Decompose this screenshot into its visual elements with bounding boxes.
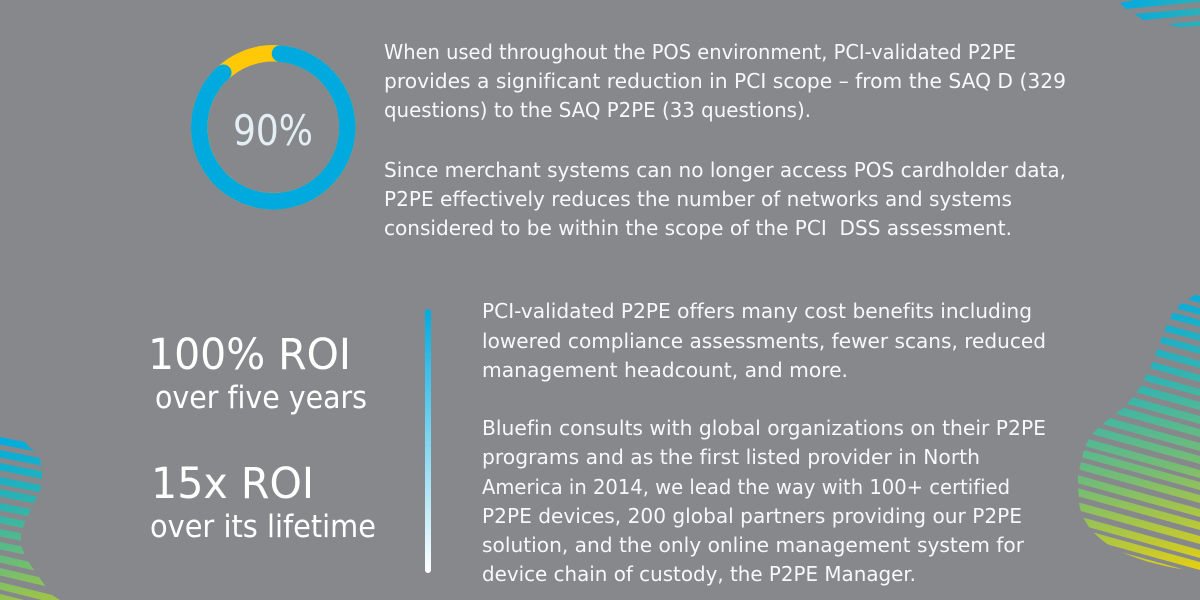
text block: cost benefits and Bluefin xyxy=(482,299,1046,586)
text block: scope reduction xyxy=(384,40,1066,240)
stat: 100% ROI over five years: over five years xyxy=(155,380,367,416)
text block: cost benefits and Bluefin: P2PE devices, 200 global partners providing our P2PE xyxy=(482,504,1022,528)
text block: cost benefits and Bluefin: lowered compliance assessments, fewer scans, reduced xyxy=(482,329,1046,353)
text block: cost benefits and Bluefin: Bluefin consults with global organizations on their P2PE xyxy=(482,416,1046,440)
stat: 15x ROI over its lifetime: over its lifetime xyxy=(150,509,376,545)
text block: scope reduction: P2PE effectively reduces the number of networks and systems xyxy=(384,187,1012,211)
text block: scope reduction: When used throughout the POS environment, PCI-validated P2PE xyxy=(384,40,1016,64)
decoration: left striped blob xyxy=(0,437,60,600)
text block: cost benefits and Bluefin: America in 2014, we lead the way with 100+ certified xyxy=(482,475,1010,499)
text block: cost benefits and Bluefin: management headcount, and more. xyxy=(482,358,848,382)
vertical gradient divider xyxy=(425,309,431,573)
text block: scope reduction: provides a significant reduction in PCI scope – from the SAQ D (329 xyxy=(384,69,1066,93)
stat: 15x ROI over its lifetime: 15x ROI xyxy=(151,459,314,509)
decoration: right striped blob xyxy=(1078,294,1200,570)
chart: 90% donut xyxy=(199,53,347,201)
text block: cost benefits and Bluefin: solution, and the only online management system for xyxy=(482,533,1025,557)
text block: scope reduction: considered to be within the scope of the PCI DSS assessment. xyxy=(384,216,1012,240)
text block: cost benefits and Bluefin: programs and as the first listed provider in North xyxy=(482,445,980,469)
text block: cost benefits and Bluefin: device chain of custody, the P2PE Manager. xyxy=(482,562,916,586)
decoration: top right striped blob xyxy=(1120,0,1200,27)
text block: scope reduction: questions) to the SAQ P2PE (33 questions). xyxy=(384,98,811,122)
donut value: 90% xyxy=(233,106,313,155)
text block: cost benefits and Bluefin: PCI-validated P2PE offers many cost benefits including xyxy=(482,299,1032,323)
stat: 15x ROI over its lifetime xyxy=(150,459,376,545)
text block: scope reduction: Since merchant systems can no longer access POS cardholder data, xyxy=(384,158,1066,182)
stat: 100% ROI over five years xyxy=(148,330,367,416)
stat: 100% ROI over five years: 100% ROI xyxy=(148,330,351,380)
